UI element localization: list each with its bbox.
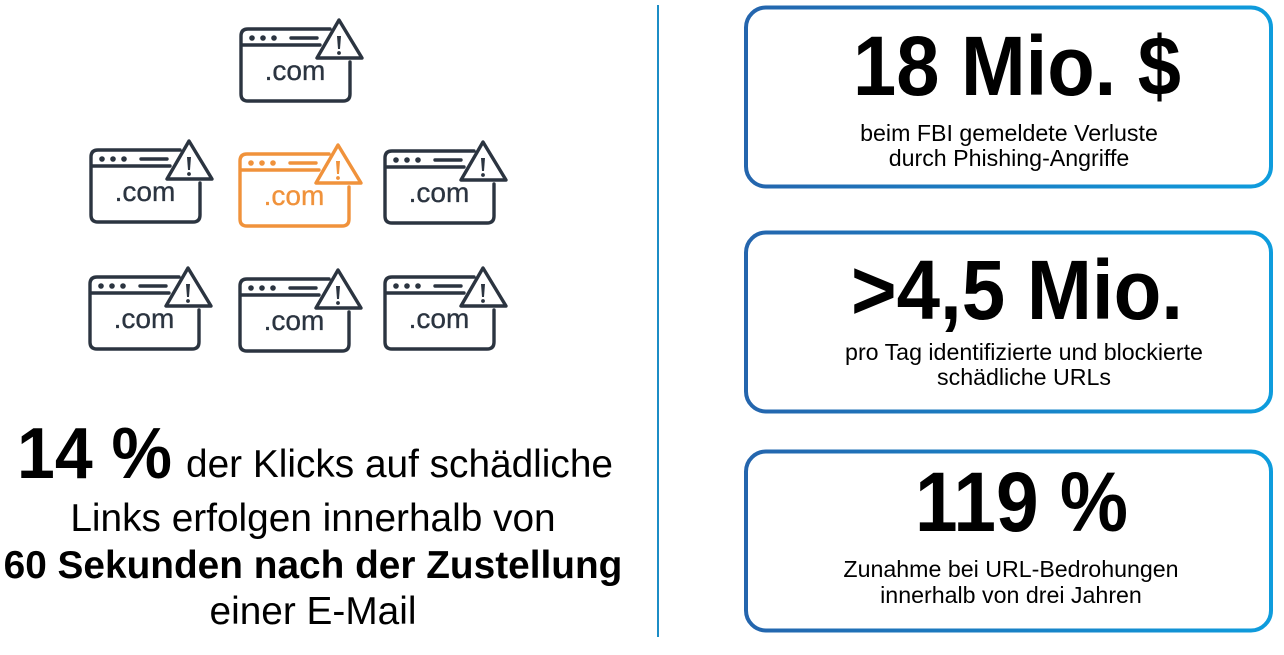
icon: warning domain row 3 left: .com: [114, 303, 174, 334]
text block: 14 percent statement: 14 %: [17, 414, 172, 494]
panel: over 4.5 Mio. malicious URLs: >4,5 Mio.: [851, 243, 1183, 337]
text block: 14 percent statement: 60 Sekunden nach der Zustellung: [4, 544, 622, 587]
panel: 18 Mio. dollar losses: [746, 8, 1271, 186]
icon: warning domain row 2 right: .com: [409, 177, 469, 208]
text block: 14 percent statement: einer E-Mail: [210, 590, 416, 633]
panel: 119 percent increase: [746, 452, 1271, 630]
icon: warning domain row 3 left: [90, 268, 211, 349]
icon: highlighted orange warning domain: [240, 145, 361, 226]
icon: highlighted orange warning domain: .com: [264, 180, 324, 211]
panel: 119 percent increase: innerhalb von drei Jahren: [880, 582, 1142, 608]
panel: 18 Mio. dollar losses: durch Phishing-Angriffe: [889, 145, 1129, 171]
panel: 18 Mio. dollar losses: beim FBI gemeldete Verluste: [860, 120, 1158, 146]
panel: over 4.5 Mio. malicious URLs: pro Tag identifizierte und blockierte: [845, 339, 1203, 365]
icon: warning domain row 3 middle: .com: [264, 305, 324, 336]
panel: 18 Mio. dollar losses: 18 Mio. $: [853, 19, 1181, 113]
panel: 119 percent increase: Zunahme bei URL-Bedrohungen: [843, 556, 1179, 582]
icon: warning domain row 2 left: .com: [115, 176, 175, 207]
icon: warning domain row 2 right: [385, 142, 506, 223]
text block: 14 percent statement: der Klicks auf schädliche: [186, 443, 613, 486]
panel: over 4.5 Mio. malicious URLs: [746, 232, 1271, 412]
text block: 14 percent statement: [4, 414, 622, 633]
panel: 119 percent increase: 119 %: [915, 455, 1128, 549]
panel: over 4.5 Mio. malicious URLs: schädliche URLs: [937, 364, 1111, 390]
icon: warning domain top: .com: [265, 55, 325, 86]
icon: warning domain top: [241, 20, 362, 101]
icon: warning domain row 3 right: [385, 268, 506, 349]
icon: warning domain row 3 right: .com: [409, 303, 469, 334]
icon: warning domain row 2 left: [91, 141, 212, 222]
text block: 14 percent statement: Links erfolgen innerhalb von: [70, 497, 556, 540]
icon: warning domain row 3 middle: [240, 270, 361, 351]
